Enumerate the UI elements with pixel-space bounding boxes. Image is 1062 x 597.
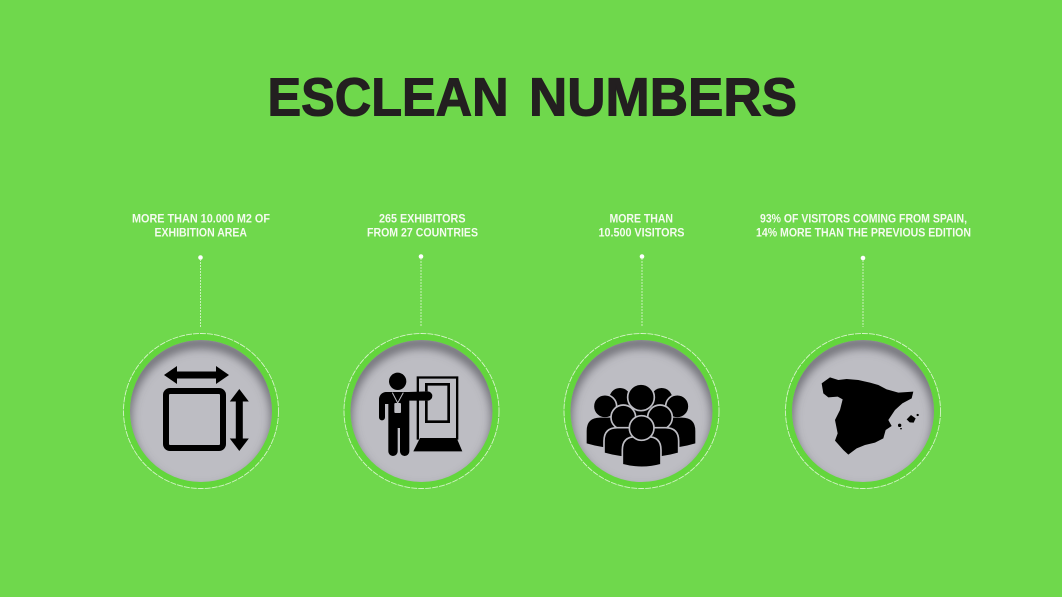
panel: exhibition area xyxy=(124,214,278,493)
icon: map of Spain xyxy=(822,377,919,455)
label: visitors from Spain: 14% MORE THAN THE PREVIOUS EDITION xyxy=(756,228,971,240)
connector: exhibitors xyxy=(419,254,423,327)
label: visitors: 10.500 VISITORS xyxy=(598,228,685,240)
connector: visitors xyxy=(640,254,644,327)
label: exhibition area: MORE THAN 10.000 M2 OF xyxy=(132,214,270,226)
connector: visitors from Spain xyxy=(861,256,865,327)
panel: exhibitors xyxy=(344,214,499,493)
label: visitors from Spain: 93% OF VISITORS COMING FROM SPAIN, xyxy=(760,214,967,226)
connector: exhibition area xyxy=(198,255,203,327)
circle badge: visitors xyxy=(564,334,719,493)
icon: area square with arrows xyxy=(164,366,249,451)
icon: presenter at display stand xyxy=(379,373,462,456)
icon: crowd of people xyxy=(587,384,695,467)
label: visitors: MORE THAN xyxy=(610,214,673,226)
label: exhibitors: FROM 27 COUNTRIES xyxy=(367,228,478,240)
label: exhibition area: EXHIBITION AREA xyxy=(154,228,247,240)
title: ESCLEAN xyxy=(268,68,508,128)
circle badge: exhibitors xyxy=(344,334,499,493)
panel: visitors xyxy=(564,214,719,493)
circle badge: visitors from Spain xyxy=(786,334,940,493)
circle badge: exhibition area xyxy=(124,334,278,493)
title: NUMBERS xyxy=(529,68,797,128)
label: exhibitors: 265 EXHIBITORS xyxy=(379,214,466,226)
panel: visitors from Spain xyxy=(756,214,971,493)
